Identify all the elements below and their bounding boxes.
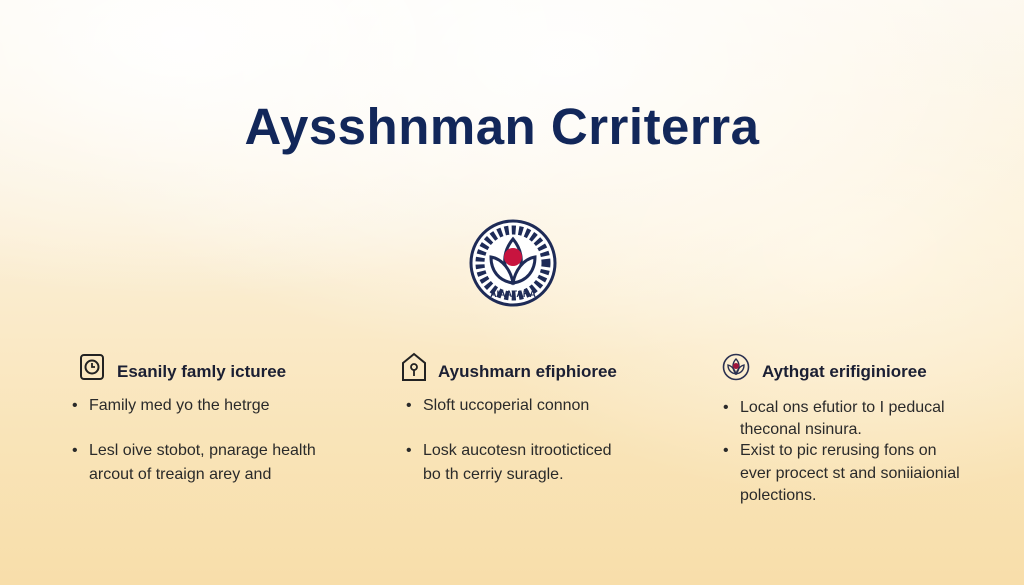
bullets — [723, 399, 945, 438]
panel: column 3: • — [723, 399, 729, 416]
panel: column 1 — [72, 354, 316, 483]
bullets: Sloft uccoperial connon — [423, 397, 589, 414]
panel: column 2: • — [406, 442, 412, 459]
panel: column 1: • — [72, 442, 78, 459]
heading: Ayushmarn efiphioree — [438, 362, 617, 381]
bullets: Family med yo the hetrge — [89, 397, 270, 414]
bullets: theconal nsinura. — [740, 421, 862, 438]
panel: column 3: ever procect st and soniiaionial — [740, 464, 960, 482]
logo emblem — [470, 220, 556, 306]
panel: column 2 — [402, 352, 617, 483]
heading: Aythgat erifiginioree — [762, 362, 927, 381]
icon: house — [402, 352, 426, 381]
icon: clock — [80, 354, 104, 380]
bullets: Local ons efutior to I peducal — [740, 399, 945, 416]
panel: column 2: Losk aucotesn itrooticticed — [423, 442, 612, 459]
panel: column 1: arcout of treaign arey and — [89, 466, 271, 483]
panel: column 1: • — [72, 397, 78, 414]
panel: column 3: polections. — [740, 487, 816, 504]
heading: Esanily famly icturee — [117, 362, 286, 381]
title: Aysshnman Crriterra — [245, 98, 759, 155]
panel: column 1: Lesl oive stobot, pnarage health — [89, 442, 316, 459]
panel: column 3: • — [723, 442, 729, 459]
panel: column 3: Exist to pic rerusing fons on — [740, 442, 937, 459]
panel: column 2: bo th cerriy suragle. — [423, 466, 564, 483]
logo emblem: AIAATAHA — [490, 289, 536, 299]
icon: lotus emblem — [722, 354, 750, 380]
panel: column 3 — [722, 354, 960, 504]
panel: column 2: • — [406, 397, 412, 414]
